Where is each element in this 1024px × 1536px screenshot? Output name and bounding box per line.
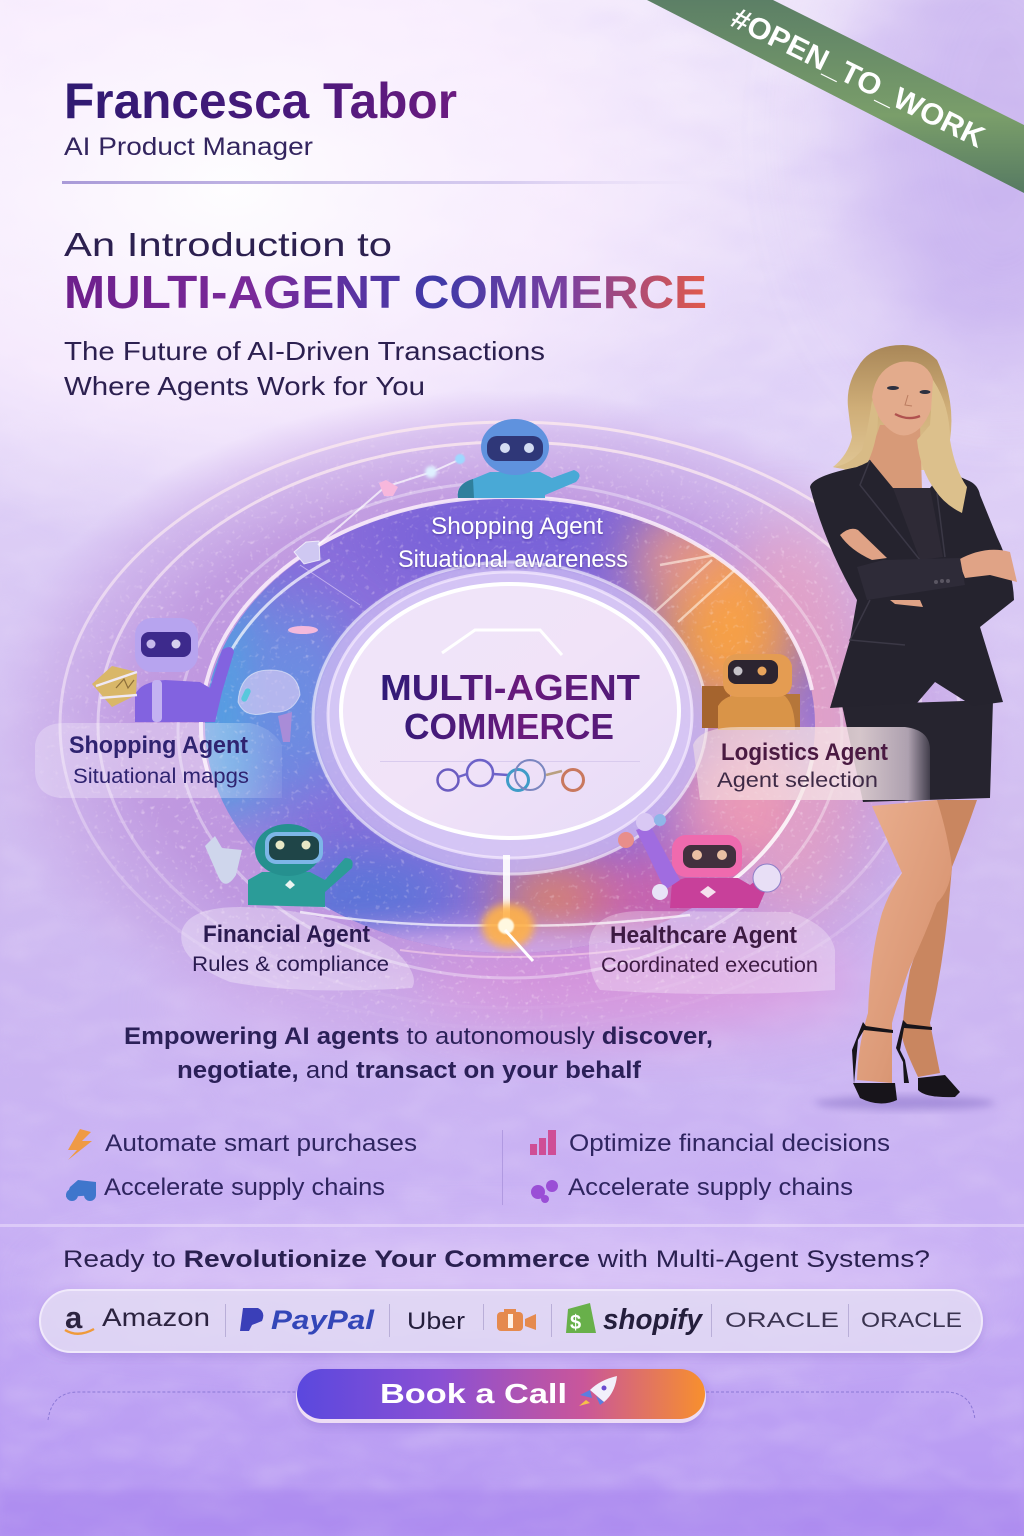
tagline <box>124 1023 713 1084</box>
subtitle <box>64 336 545 401</box>
label: shopping agent (top): Situational awareness <box>398 546 628 573</box>
benefit: supply chains left: Accelerate supply chains <box>104 1174 385 1201</box>
benefit: finance: Optimize financial decisions <box>569 1130 890 1157</box>
robot: purple shopping agent <box>92 618 234 722</box>
glass dome device <box>238 670 300 742</box>
label: shopping agent (left): Shopping Agent <box>69 732 248 759</box>
wand <box>618 813 680 890</box>
glowing junction <box>482 855 534 961</box>
robot: orange logistics agent <box>702 654 800 730</box>
label: logistics agent: Agent selection <box>717 769 878 792</box>
subtitle: The Future of AI-Driven Transactions <box>64 336 545 366</box>
icon: rocket <box>579 1376 617 1406</box>
blazer <box>810 460 1014 708</box>
back leg <box>902 800 977 1077</box>
logo: amazon: Amazon <box>102 1304 210 1332</box>
call-to-action heading: Ready to Revolutionize Your Commerce with Multi-Agent Systems? <box>63 1246 930 1273</box>
face <box>872 361 934 436</box>
node: pink gem and link <box>318 454 465 545</box>
label: healthcare agent <box>589 911 835 994</box>
diagram glow and outer orbit rings <box>16 402 968 1059</box>
tagline: Empowering AI agents to autonomously discover, <box>124 1023 713 1050</box>
logo: amazon: a <box>65 1300 83 1335</box>
title: multi-agent commerce: MULTI-AGENT COMMERCE <box>64 266 707 318</box>
robot: teal financial agent <box>205 824 353 907</box>
logo: oracle one: ORACLE <box>725 1309 839 1332</box>
orb hand <box>753 864 781 892</box>
presenter portrait <box>810 345 1017 1110</box>
label: logistics agent: Logistics Agent <box>721 739 888 766</box>
hair lock left <box>833 400 878 469</box>
book a call button <box>296 1369 706 1423</box>
robot: blue shopping agent <box>458 419 580 498</box>
hair back <box>833 345 951 472</box>
benefits list <box>66 1129 890 1205</box>
logo: shopify: $ <box>570 1312 581 1334</box>
segmented agent ring <box>190 454 830 976</box>
title: intro line: An Introduction to <box>64 226 392 263</box>
icon: truck <box>66 1180 96 1201</box>
hub constellation <box>442 630 562 655</box>
forearm sleeve <box>857 558 965 600</box>
front leg <box>857 800 952 1083</box>
hands <box>840 529 1017 607</box>
robot: pink healthcare agent <box>618 813 781 908</box>
dashed connector <box>48 1392 975 1420</box>
label: logistics agent <box>693 727 930 800</box>
book a call button: Book a Call <box>380 1378 567 1409</box>
icon: gears <box>531 1180 558 1203</box>
label: financial agent: Rules & compliance <box>192 953 389 976</box>
logo: shopify: shopify <box>603 1304 704 1336</box>
benefit: automate: Automate smart purchases <box>105 1130 417 1157</box>
label: shopping agent (top) <box>398 513 628 573</box>
label: healthcare agent: Healthcare Agent <box>610 922 797 949</box>
logo: amazon <box>65 1300 210 1335</box>
cuff buttons <box>934 579 950 584</box>
node: small connector <box>288 626 318 634</box>
hub title: COMMERCE <box>404 706 614 747</box>
logo: paypal <box>240 1305 375 1335</box>
benefit: supply chains right: Accelerate supply chains <box>568 1174 853 1201</box>
skirt <box>842 700 993 802</box>
label: shopping agent (left) <box>35 723 282 798</box>
label: shopping agent (left): Situational mapgs <box>73 765 249 788</box>
node: gem top-left <box>294 541 320 564</box>
chain icon <box>438 760 584 790</box>
job title: AI Product Manager <box>64 133 313 161</box>
icon: bar chart <box>530 1130 556 1155</box>
ribbon: open to work: #OPEN_TO_WORK <box>726 2 990 155</box>
label: financial agent <box>181 907 414 990</box>
facial features <box>887 386 930 418</box>
dress panel <box>893 488 943 560</box>
flower <box>652 884 668 900</box>
logo: uber: Uber <box>407 1308 465 1335</box>
logo: medical kit <box>497 1309 536 1331</box>
label: healthcare agent: Coordinated execution <box>601 954 818 977</box>
neck <box>868 425 922 490</box>
trophy hand <box>205 836 242 884</box>
hub title: MULTI-AGENT <box>380 667 640 708</box>
floor shadow <box>815 1096 995 1110</box>
hair lock over blazer <box>917 380 967 513</box>
central hub <box>341 584 679 838</box>
subtitle: Where Agents Work for You <box>64 371 425 401</box>
logo: shopify <box>566 1303 704 1336</box>
lapel lines <box>850 460 945 645</box>
envelope <box>92 666 137 707</box>
inner lilac band <box>313 562 707 874</box>
header divider <box>62 181 702 184</box>
hub title <box>380 667 640 747</box>
shoes <box>852 1020 960 1104</box>
label: shopping agent (top): Shopping Agent <box>431 513 603 540</box>
icon: lightning <box>68 1129 92 1160</box>
column divider <box>502 1130 503 1205</box>
tagline: negotiate, and transact on your behalf <box>177 1057 642 1084</box>
label: financial agent: Financial Agent <box>203 921 370 948</box>
partner logos pill <box>40 1290 982 1352</box>
logo: paypal: PayPal <box>271 1305 375 1335</box>
logo: oracle two: ORACLE <box>861 1309 962 1332</box>
ribbon: open to work <box>647 0 1024 193</box>
presenter name: Francesca Tabor <box>64 73 457 129</box>
